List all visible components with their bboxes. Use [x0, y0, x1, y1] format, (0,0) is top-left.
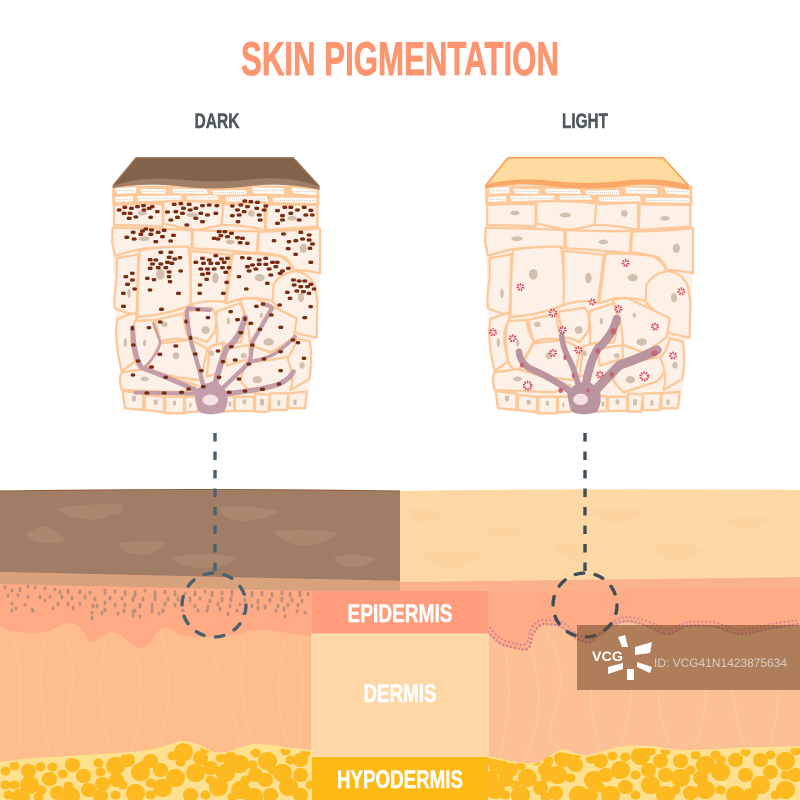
dark magnifier circle	[182, 573, 246, 637]
melanocyte: light	[519, 319, 657, 414]
melanocyte nucleus	[202, 395, 218, 405]
light pigment layer	[488, 617, 800, 650]
label: dermis	[312, 634, 488, 757]
label: epidermis	[312, 591, 488, 634]
panel: light skin cell block	[485, 158, 693, 414]
dark surface lower band	[113, 178, 319, 190]
heading: dark: DARK	[194, 110, 240, 133]
light skin surface	[400, 489, 800, 582]
title: SKIN PIGMENTATION	[241, 32, 559, 85]
fat layer: left	[0, 741, 312, 800]
panel: dark skin cell block	[112, 158, 320, 414]
dark dermis	[0, 623, 312, 770]
melanosome clusters: light	[490, 260, 684, 389]
light surface lower band	[486, 179, 688, 190]
dark surface blotches	[26, 504, 376, 568]
dark pigment dots	[5, 586, 308, 619]
heading: light: LIGHT	[562, 110, 608, 133]
melanocyte: dark	[133, 304, 295, 414]
fat globules right	[490, 751, 796, 797]
dark dermis fibres	[15, 630, 302, 755]
panel: dark skin cross-section	[0, 433, 400, 770]
melanocyte nucleus	[573, 394, 588, 405]
melanosomes: dark	[118, 201, 315, 393]
fat background right	[488, 746, 800, 800]
light dermis	[488, 622, 800, 770]
label: hypodermis	[312, 757, 488, 800]
dark skin cells	[112, 187, 320, 413]
watermark logo	[608, 635, 652, 680]
dark top surface	[113, 158, 319, 189]
panel: light skin cross-section	[400, 433, 800, 770]
melanocyte pigment ovals	[520, 328, 658, 393]
label: dermis: DERMIS	[364, 680, 436, 708]
watermark id: ID: VCG41N1423875634	[654, 656, 787, 670]
label: hypodermis: HYPODERMIS	[337, 766, 463, 794]
watermark logo text: VCG	[592, 648, 623, 664]
light surface under-band	[400, 577, 800, 592]
light dermis fibres	[500, 630, 779, 760]
dark surface top edge	[0, 490, 400, 491]
light epidermis	[488, 585, 800, 660]
light top surface	[486, 158, 688, 189]
watermark	[577, 625, 800, 690]
light magnifier line	[583, 433, 587, 572]
fat layer: right	[488, 746, 800, 800]
light magnifier circle	[553, 573, 617, 637]
panel: layer labels	[312, 591, 488, 800]
label: epidermis: EPIDERMIS	[348, 600, 452, 628]
dark skin surface	[0, 490, 400, 581]
fat globules left	[5, 749, 311, 798]
watermark panel	[577, 625, 800, 690]
fat background left	[0, 741, 312, 800]
light surface blotches	[410, 508, 775, 568]
dark epidermis	[0, 570, 312, 655]
dark surface under-band	[0, 572, 400, 592]
light skin cells	[485, 187, 693, 413]
dark magnifier line	[213, 433, 217, 572]
